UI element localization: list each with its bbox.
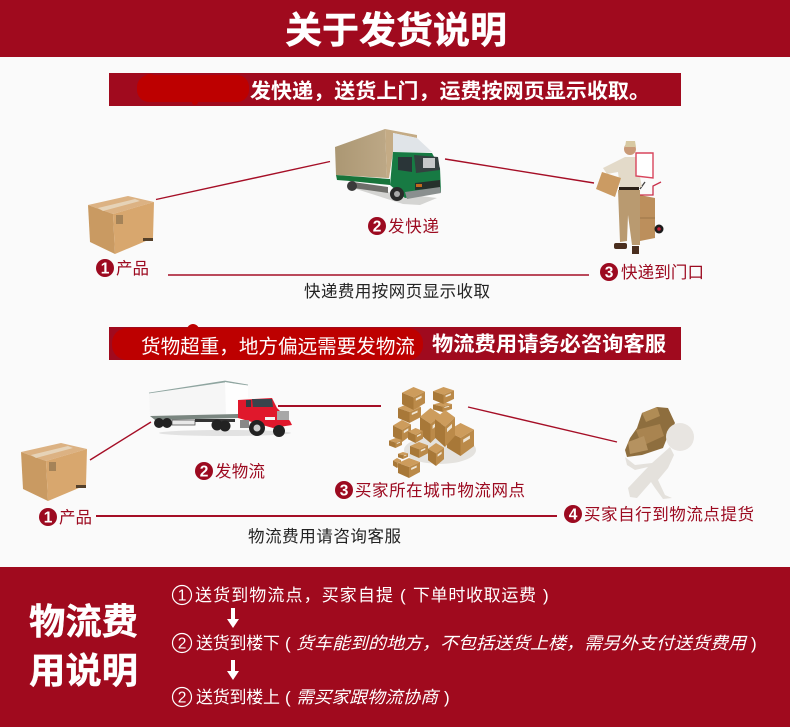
option 3: ( xyxy=(285,688,291,707)
heading: freight explanation: 用说明 xyxy=(29,650,138,691)
banner: express delivery xyxy=(109,73,681,106)
option 1: 送货到物流点，买家自提 xyxy=(195,586,393,605)
heading: freight explanation xyxy=(29,601,138,691)
label: courier to door: 3 xyxy=(605,264,614,282)
label: product 2: 产品 xyxy=(59,508,92,527)
option 1: 1 xyxy=(178,588,186,604)
icon: red freight truck xyxy=(149,381,292,437)
banner: freight: 货物超重，地方偏远需要发物流 xyxy=(141,336,415,358)
option 3 xyxy=(172,688,450,707)
arrow line: depot to pickup xyxy=(468,407,617,442)
icon: green express truck xyxy=(335,129,441,205)
icon: parcel box xyxy=(88,196,154,254)
option 1: 下单时收取运费 xyxy=(413,586,536,605)
option 3: 2 xyxy=(178,690,186,706)
option 3: 需买家跟物流协商 xyxy=(296,688,441,707)
bottom line: freight cost xyxy=(96,515,557,517)
label: product: 1 xyxy=(101,260,110,278)
banner: freight: 物流费用请务必咨询客服 xyxy=(432,332,667,356)
arrow down 1 xyxy=(227,608,239,628)
icon: pile of boxes xyxy=(389,387,476,478)
label: send express: 2 xyxy=(373,218,381,236)
panel: freight explanation xyxy=(0,567,790,727)
label: product 2 xyxy=(39,508,92,527)
label: product: 产品 xyxy=(116,259,149,278)
label: send freight xyxy=(195,462,265,481)
option 2: 2 xyxy=(178,636,186,652)
icon: parcel box 2 xyxy=(21,443,87,501)
option 1: ) xyxy=(543,586,549,605)
option 1: ( xyxy=(400,586,406,605)
label: send freight: 2 xyxy=(200,464,208,480)
label: buyer self pickup: 买家自行到物流点提货 xyxy=(584,505,754,524)
option 3: 送货到楼上 xyxy=(196,688,280,707)
arrow line: express to courier xyxy=(445,159,594,183)
label: buyer city depot: 3 xyxy=(340,482,349,500)
icon: courier with hand truck xyxy=(596,141,664,254)
label: send express: 发快递 xyxy=(388,217,439,236)
arrow down 2 xyxy=(227,660,239,680)
label: product 2: 1 xyxy=(44,510,53,526)
icon: white figure carrying boxes xyxy=(625,407,694,499)
option 2: ( xyxy=(285,634,291,653)
header bar xyxy=(0,0,790,57)
option 2: 货车能到的地方，不包括送货上楼，需另外支付送货费用 xyxy=(296,634,748,653)
heading: freight explanation: 物流费 xyxy=(29,601,138,642)
title: 关于发货说明 xyxy=(285,10,507,51)
label: buyer city depot: 买家所在城市物流网点 xyxy=(355,481,525,500)
note: express cost: 快递费用按网页显示收取 xyxy=(304,282,490,301)
label: buyer self pickup: 4 xyxy=(569,506,578,524)
arrow line: freight to depot xyxy=(278,405,381,407)
option 2: ) xyxy=(751,634,757,653)
label: product xyxy=(96,259,149,278)
label: send freight: 发物流 xyxy=(215,462,265,481)
note: freight cost: 物流费用请咨询客服 xyxy=(248,527,401,546)
option 2: 送货到楼下 xyxy=(196,634,280,653)
arrow line: product to express xyxy=(156,162,330,200)
option 1 xyxy=(172,586,549,605)
label: courier to door: 快递到门口 xyxy=(621,263,704,282)
label: send express xyxy=(368,217,439,236)
bottom line: express cost xyxy=(168,274,589,276)
banner: freight xyxy=(109,324,681,360)
banner: express delivery: 发快递，送货上门，运费按网页显示收取。 xyxy=(250,79,650,103)
arrow line: product to freight xyxy=(90,422,151,460)
option 3: ) xyxy=(444,688,450,707)
